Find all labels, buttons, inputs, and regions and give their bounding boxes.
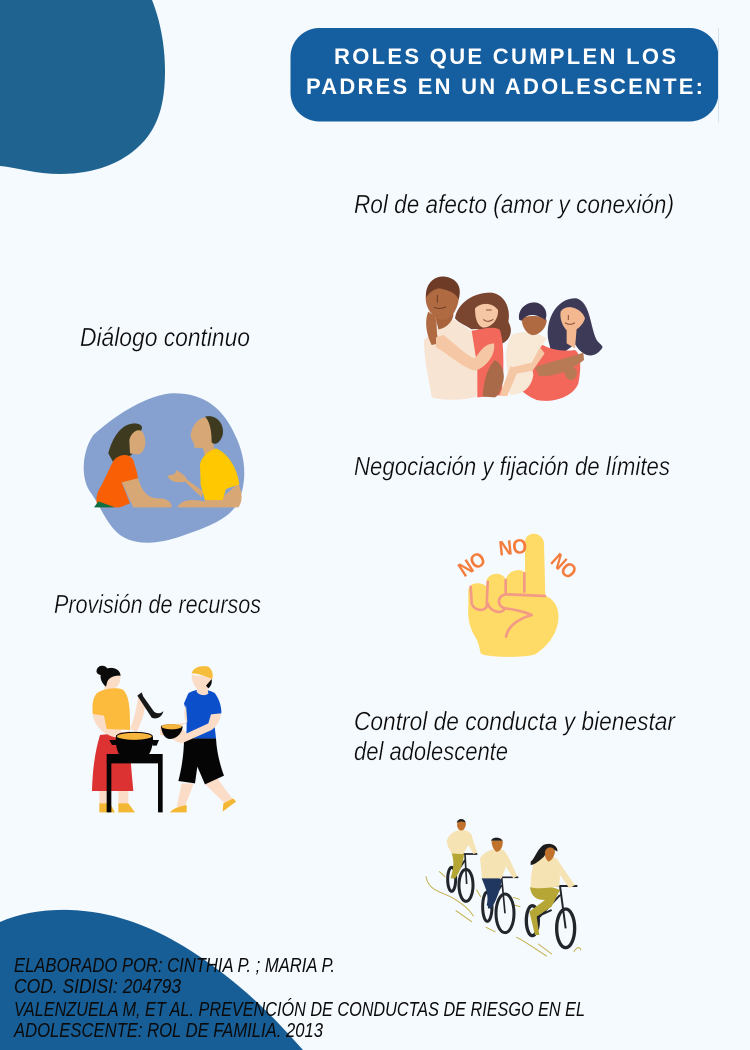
man arm	[177, 483, 242, 507]
man shirt	[200, 448, 239, 500]
illustration: hand with raised finger saying no	[454, 534, 581, 657]
heading: rol de afecto: Rol de afecto (amor y conexión)	[354, 189, 674, 219]
decorative blob: bottom left	[0, 910, 303, 1050]
boy hair	[519, 302, 546, 321]
woman 1 smile	[483, 310, 493, 321]
woman hair	[96, 666, 121, 687]
rider 1 legs	[451, 853, 464, 878]
man shirt	[184, 690, 221, 738]
table	[107, 754, 163, 812]
footer credits: COD. SIDISI: 204793	[14, 976, 181, 998]
pot	[109, 737, 159, 755]
road strokes	[426, 872, 581, 956]
bike 2 frame	[488, 877, 518, 913]
rider 2 hair	[491, 838, 503, 841]
title banner	[290, 28, 719, 122]
footer credits: ELABORADO POR: CINTHIA P. ; MARIA P.	[14, 955, 335, 977]
man shoes	[170, 798, 236, 812]
woman arm	[122, 478, 172, 507]
illustration: family hugging	[424, 276, 602, 401]
woman 1 leg	[483, 360, 504, 397]
woman 1 dress	[472, 328, 503, 397]
man shorts	[178, 738, 224, 784]
rider 3 hair	[531, 844, 557, 865]
heading: control de conducta: Control de conducta y bienestar	[354, 706, 676, 736]
woman 2 smile	[565, 315, 575, 324]
woman 1 face	[475, 304, 498, 328]
woman legs	[99, 790, 128, 805]
bowl soup	[162, 724, 182, 729]
woman neck	[104, 683, 117, 695]
bike 3 frame	[533, 886, 577, 928]
woman hair	[108, 423, 142, 462]
footer credits: ADOLESCENTE: ROL DE FAMILIA. 2013	[13, 1020, 323, 1042]
no right: NO	[546, 549, 581, 584]
blue blob	[84, 393, 244, 543]
woman 2 dress	[523, 343, 580, 401]
decorative blob: top left	[0, 0, 165, 174]
heading: control de conducta	[354, 706, 676, 766]
rider 1 shirt	[447, 830, 477, 854]
no left: NO	[454, 547, 490, 582]
man shirt	[424, 319, 482, 400]
woman shoes	[99, 803, 135, 812]
man hair	[206, 679, 212, 688]
woman face	[129, 430, 145, 454]
rider 2 jeans	[482, 877, 502, 909]
woman 2 hair	[548, 298, 602, 355]
pot rim with soup	[116, 732, 152, 740]
bike 1 wheels	[448, 867, 473, 901]
rider 3 shirt	[531, 856, 575, 888]
woman head	[103, 670, 121, 688]
illustration: couple cooking	[92, 666, 236, 812]
heading: negociacion y limites: Negociación y fijación de límites	[354, 451, 670, 481]
rider 2 head	[492, 841, 503, 852]
man head	[192, 675, 212, 689]
finger creases	[471, 573, 545, 637]
heading: dialogo continuo: Diálogo continuo	[80, 322, 250, 352]
ladle	[137, 692, 163, 718]
footer credits	[13, 955, 585, 1042]
chair seat	[94, 501, 115, 507]
bike 2 wheels	[483, 892, 514, 933]
illustration: two people talking on blue blob	[84, 393, 244, 543]
rider 3 legs	[529, 886, 560, 935]
boy leg	[499, 366, 518, 396]
rider 1 hair	[457, 819, 466, 823]
woman shirt	[92, 688, 130, 730]
man hair	[205, 416, 223, 444]
man legs	[177, 777, 233, 807]
woman shirt	[96, 455, 138, 507]
man arm	[426, 312, 439, 345]
footer credits: VALENZUELA M, ET AL. PREVENCIÓN DE CONDUCTAS DE RIESGO EN EL	[14, 998, 585, 1021]
man neck	[197, 687, 208, 695]
man head	[426, 286, 459, 320]
rider 1 head	[457, 820, 466, 831]
bowl	[161, 724, 183, 739]
woman 2 hand	[563, 365, 577, 380]
heading: provision de recursos: Provisión de recursos	[54, 589, 261, 619]
title banner: PADRES EN UN ADOLESCENTE:	[306, 74, 703, 99]
man arm	[160, 705, 221, 743]
boy arm	[512, 347, 545, 374]
illustration: family riding bicycles	[426, 819, 581, 956]
yellow hand	[468, 534, 558, 657]
woman 1 hair	[455, 293, 511, 343]
bike 3 wheels	[526, 906, 575, 948]
man raised hand	[167, 470, 203, 497]
woman arms	[93, 697, 145, 738]
man hair	[426, 276, 460, 299]
woman 2 face	[560, 307, 585, 332]
title banner: ROLES QUE CUMPLEN LOS	[334, 44, 676, 69]
rider 3 face	[545, 847, 555, 862]
heading: control de conducta: del adolescente	[354, 736, 508, 766]
man neck	[435, 313, 453, 329]
man neck	[202, 440, 214, 457]
woman skirt	[92, 732, 133, 791]
woman 2 arm	[535, 353, 584, 376]
man head	[191, 417, 213, 448]
boy shirt	[506, 332, 547, 395]
man cap	[192, 666, 213, 679]
boy head	[522, 316, 547, 335]
man smile	[434, 295, 446, 309]
woman 1 arm	[436, 335, 494, 371]
woman 2 neck	[567, 328, 577, 348]
rider 2 shirt	[480, 849, 517, 878]
no center: NO	[497, 535, 528, 561]
bike 1 frame	[453, 854, 477, 884]
